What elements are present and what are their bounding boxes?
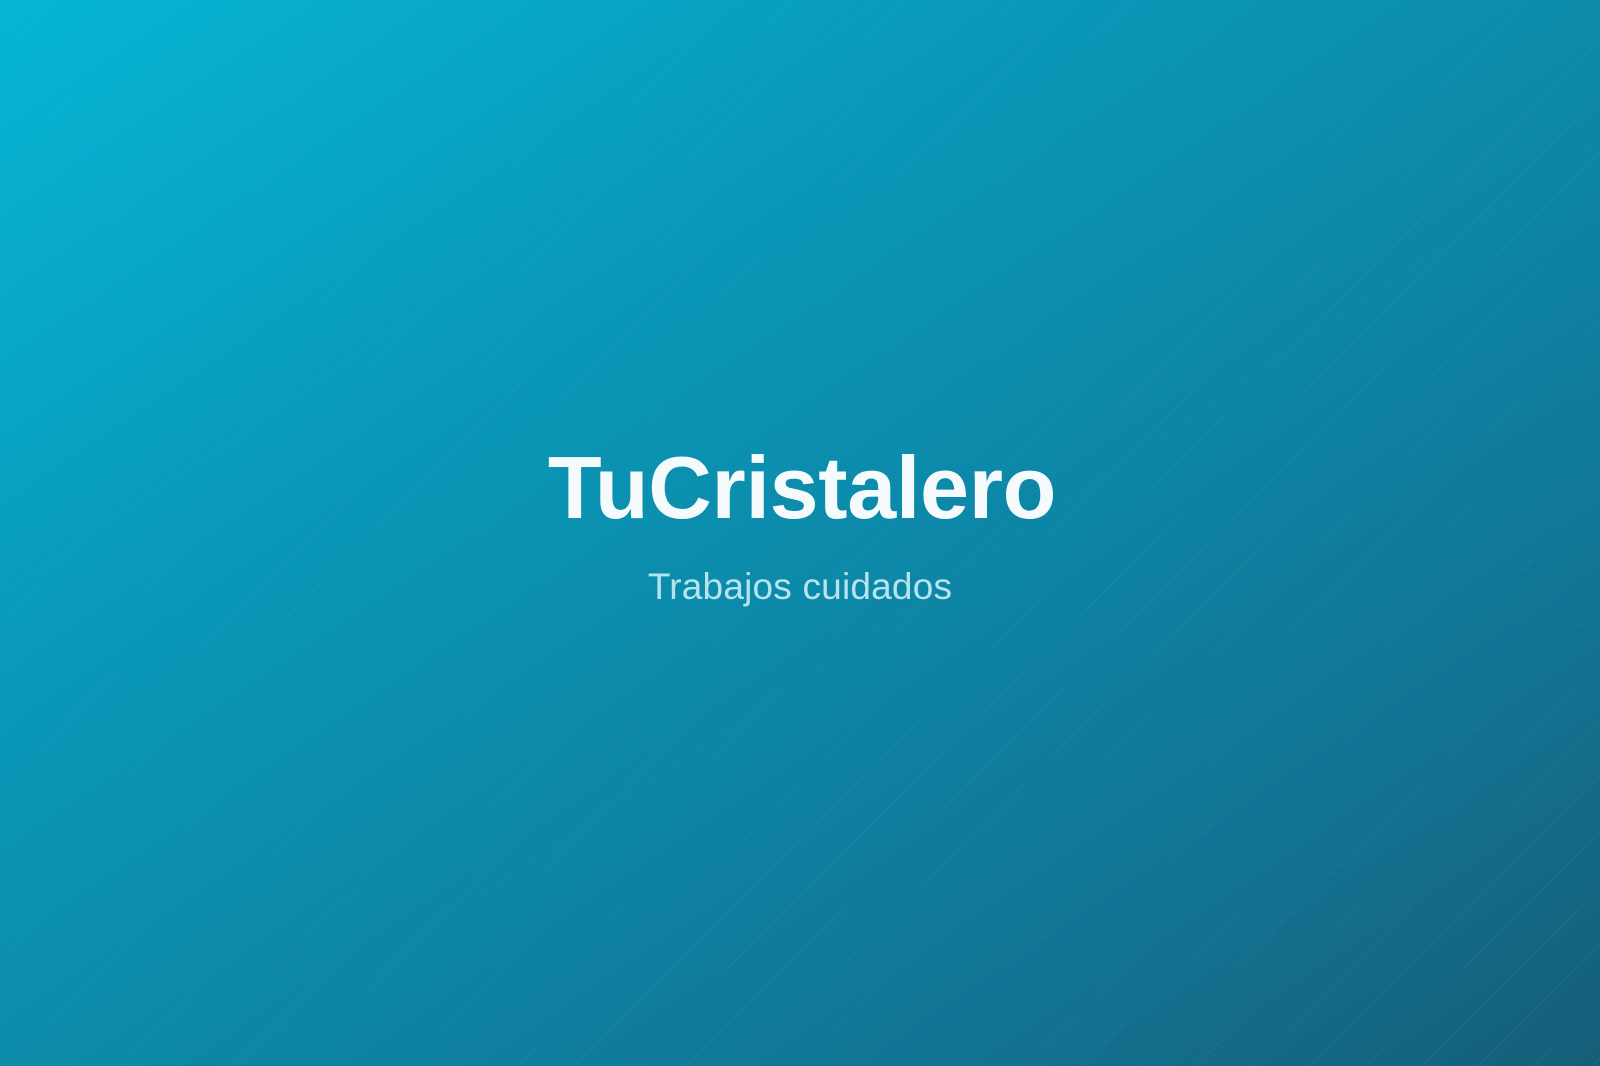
subtitle: Trabajos cuidados — [648, 566, 952, 607]
title: TuCristalero — [548, 438, 1056, 537]
